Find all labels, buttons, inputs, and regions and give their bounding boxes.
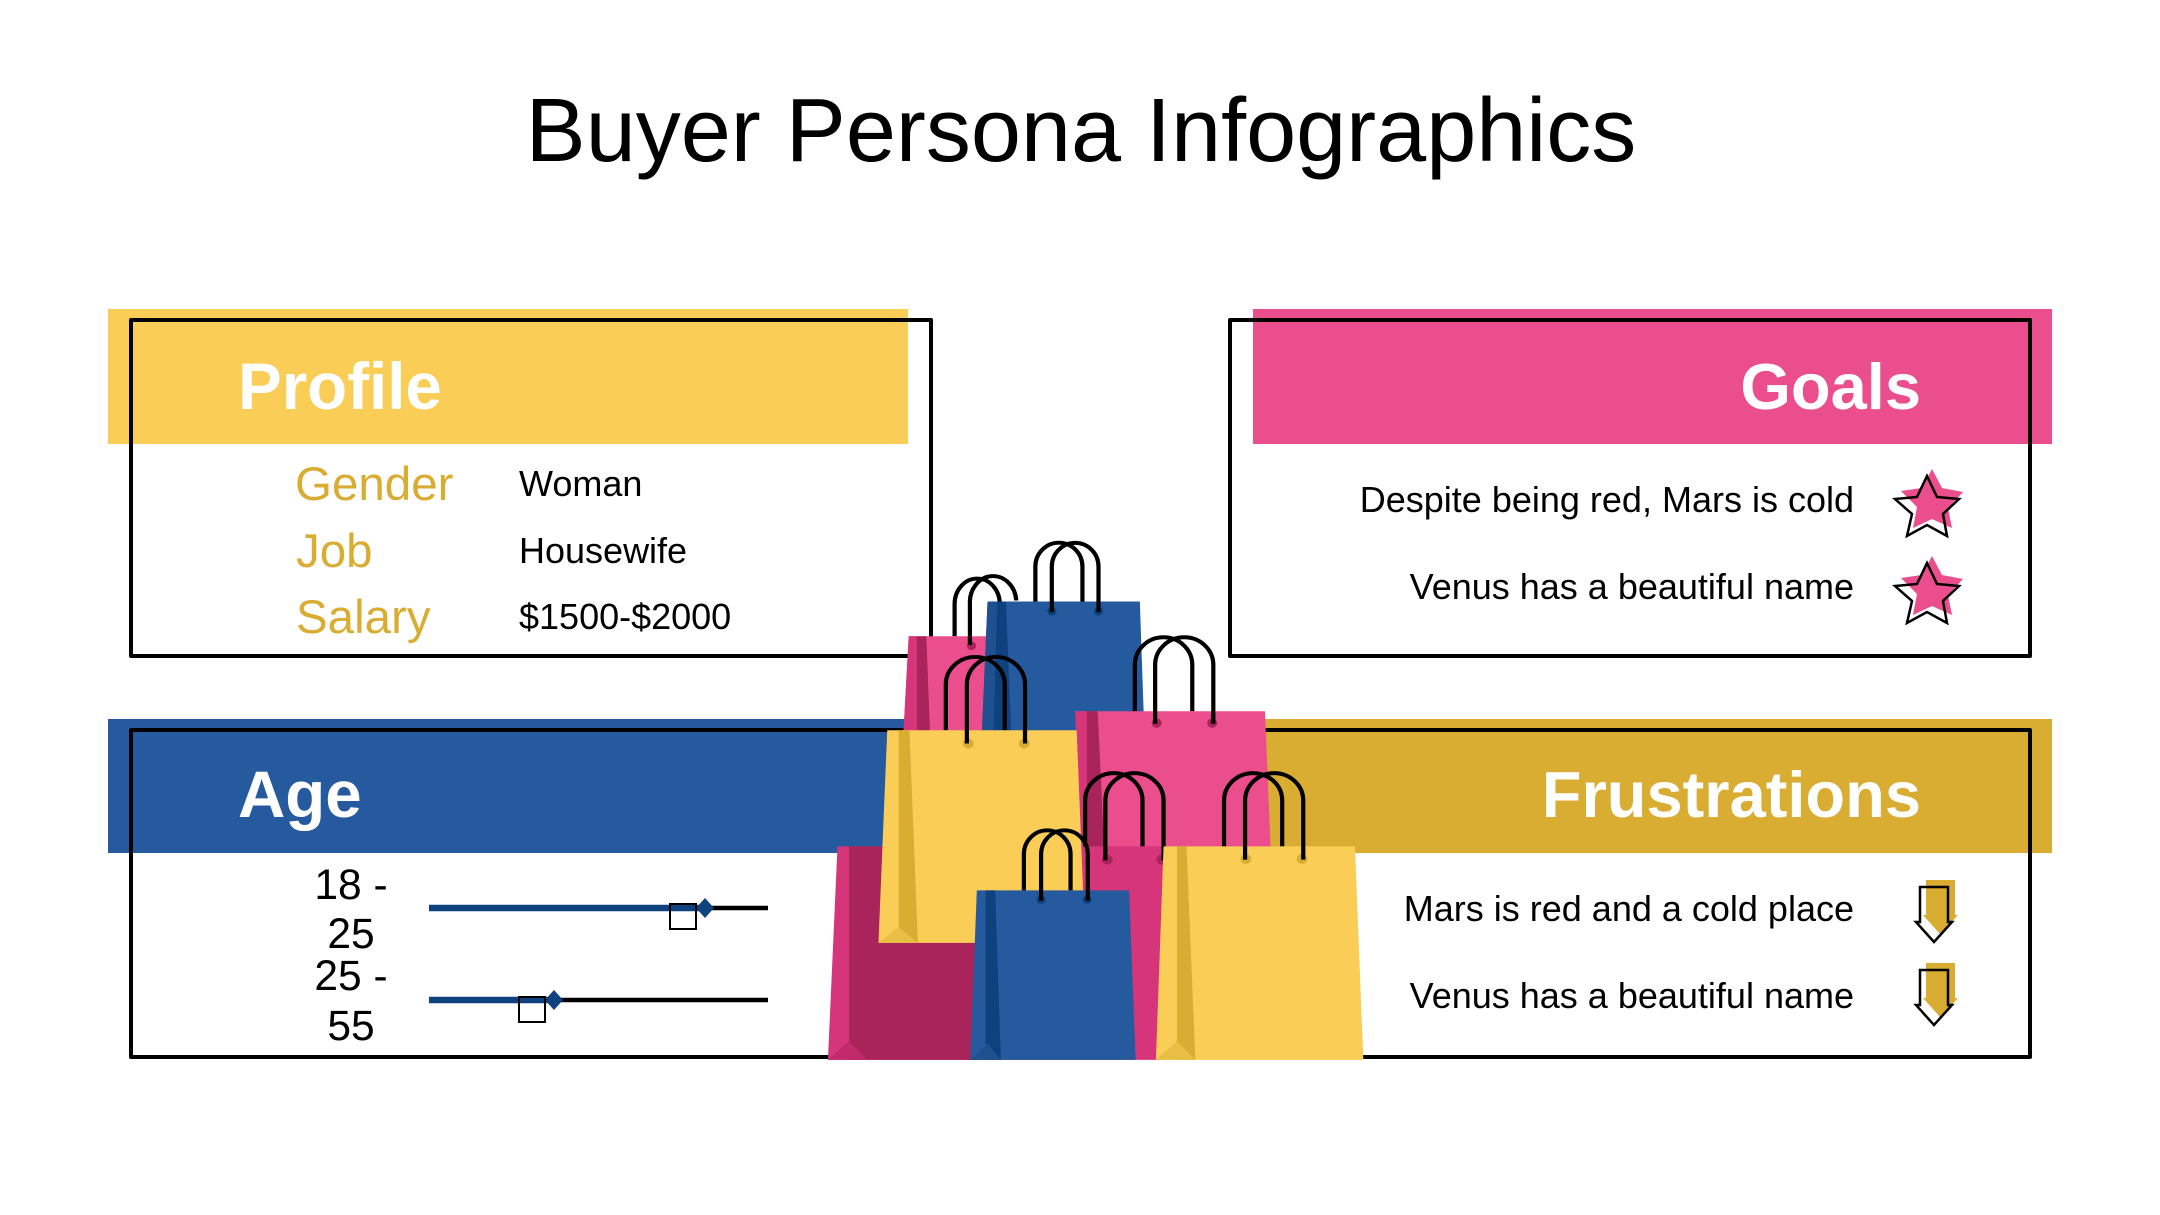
bag: left yellow <box>878 657 1085 943</box>
title: Buyer Persona Infographics <box>526 81 1636 181</box>
goal text 1: Despite being red, Mars is cold <box>1360 479 1854 520</box>
bag: front yellow <box>1156 773 1363 1060</box>
goal text 2: Venus has a beautiful name <box>1410 566 1854 607</box>
bag: right pink <box>1075 637 1271 851</box>
icon: star 2 <box>1895 556 1963 623</box>
heading: frustrations: Frustrations <box>1542 758 1921 831</box>
slider 25-55 <box>429 990 768 1022</box>
frustration text 1: Mars is red and a cold place <box>1404 888 1854 929</box>
bag: front blue <box>970 830 1136 1060</box>
value: housewife: Housewife <box>519 530 687 571</box>
heading: goals: Goals <box>1740 350 1921 423</box>
panel: frustrations <box>1230 719 2052 1057</box>
value: woman: Woman <box>519 463 642 504</box>
icon: arrow 2 <box>1916 963 1958 1025</box>
heading: age: Age <box>238 758 362 831</box>
value: salary: $1500-$2000 <box>519 596 731 637</box>
heading: profile: Profile <box>238 350 442 423</box>
label: salary: Salary <box>296 591 431 644</box>
panel: goals <box>1230 309 2052 656</box>
bag: back blue <box>982 543 1144 734</box>
age label 25-55: 25 - <box>314 953 388 1000</box>
panel: age <box>108 719 931 1057</box>
frustration text 2: Venus has a beautiful name <box>1410 975 1854 1016</box>
label: job: Job <box>296 525 373 578</box>
panel: profile <box>108 309 931 656</box>
slider 18-25 <box>429 898 768 929</box>
bag: bottom left dark pink <box>828 773 1167 1060</box>
age label 18-25: 18 - <box>314 862 388 909</box>
icon: arrow 1 <box>1916 880 1958 942</box>
icon: star 1 <box>1895 469 1963 536</box>
label: gender: Gender <box>295 458 454 511</box>
age label 25-55: 55 <box>327 1003 375 1050</box>
illustration: shopping bags <box>828 543 1363 1060</box>
age label 18-25: 25 <box>327 911 375 958</box>
bag: back pink <box>903 576 1016 734</box>
